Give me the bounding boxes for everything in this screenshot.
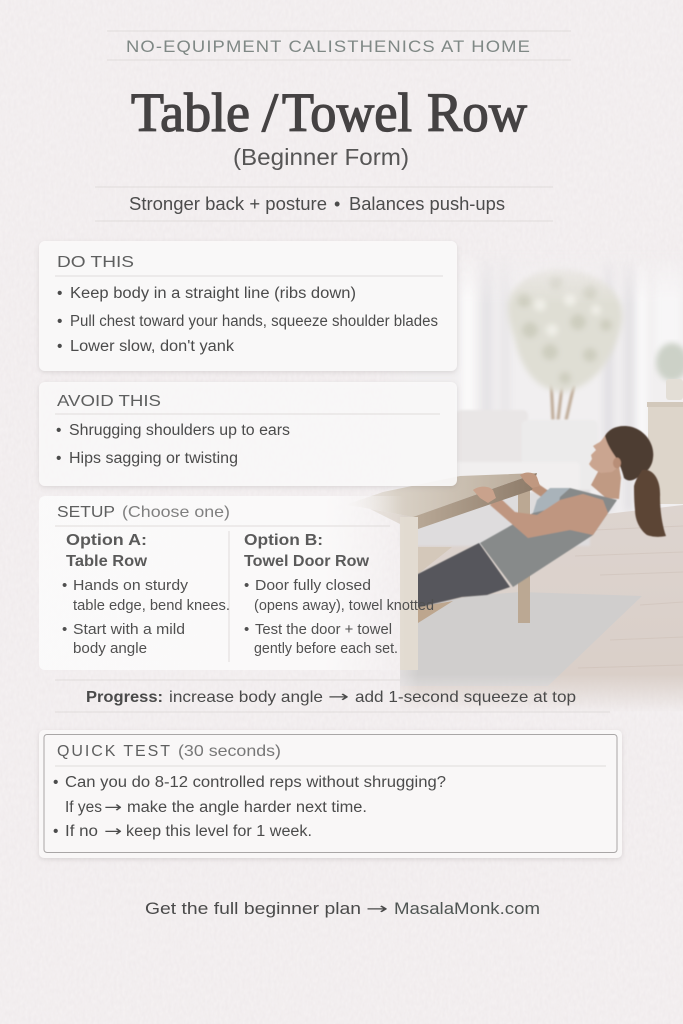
tank chest highlight <box>533 488 570 513</box>
ponytail <box>634 470 666 537</box>
benefits text: • <box>334 194 340 214</box>
room: wall, curtains and floor <box>400 280 683 705</box>
footer call to action <box>145 899 540 918</box>
heading: setup <box>57 504 230 521</box>
panel: do this <box>39 241 457 371</box>
footer call to action: → <box>366 899 388 918</box>
quick test questions: If yes <box>65 799 102 816</box>
option b: towel door row: gently before each set. <box>254 640 398 657</box>
table back leg and lower rails <box>418 490 530 623</box>
hands gripping table <box>473 487 496 503</box>
quick test questions: → <box>104 798 122 816</box>
option a: table row: • <box>62 621 67 638</box>
rug <box>411 592 642 681</box>
title: Row <box>427 82 527 143</box>
option b: towel door row: Option B: <box>244 532 323 549</box>
list: avoid this <box>56 422 290 467</box>
footer call to action: Get the full beginner plan <box>145 900 361 918</box>
list: do this: • <box>57 313 62 330</box>
heading: setup: (Choose one) <box>122 504 230 521</box>
tank top <box>480 488 617 587</box>
option b: towel door row <box>244 532 434 657</box>
table top <box>345 473 540 529</box>
side cabinet with small plant <box>647 343 683 504</box>
option b: towel door row: • <box>244 621 249 638</box>
heading: quick test: (30 seconds) <box>178 743 281 760</box>
quick test questions: Can you do 8-12 controlled reps without shrugging? <box>65 774 446 791</box>
subtitle: (Beginner Form) <box>233 144 409 170</box>
title: / <box>262 82 279 143</box>
eyebrow text: NO-EQUIPMENT CALISTHENICS AT HOME <box>126 38 531 56</box>
option a: table row: • <box>62 577 67 594</box>
option a: table row <box>62 532 230 657</box>
panel: setup <box>39 496 434 670</box>
option a: table row: Option A: <box>66 532 147 549</box>
option a: table row: Hands on sturdy <box>73 577 189 594</box>
woman <box>416 426 666 608</box>
option b: towel door row: • <box>244 577 249 594</box>
heading: quick test <box>57 743 281 760</box>
list: avoid this: Shrugging shoulders up to ears <box>69 422 290 439</box>
list: do this: Lower slow, don't yank <box>70 338 234 355</box>
list: do this <box>57 285 438 355</box>
panel: avoid this <box>39 382 457 486</box>
photo: woman doing a table row in a living room <box>364 270 683 705</box>
option b: towel door row: Door fully closed <box>255 577 371 594</box>
option a: table row: table edge, bend knees. <box>73 597 230 614</box>
progress line <box>55 680 610 712</box>
option a: table row: body angle <box>73 640 147 657</box>
benefits text: Stronger back + posture <box>129 194 327 214</box>
neck <box>590 467 622 500</box>
plant in the background <box>508 269 622 420</box>
list: do this: Pull chest toward your hands, squeeze shoulder blades <box>70 313 438 330</box>
benefits strip <box>95 187 553 221</box>
leggings <box>416 543 510 608</box>
heading: setup: SETUP <box>57 504 115 521</box>
title <box>131 82 527 143</box>
face <box>588 436 616 472</box>
heading: do this: DO THIS <box>57 254 134 271</box>
quick test questions: • <box>53 774 58 791</box>
quick test questions: • <box>53 823 58 840</box>
list: avoid this: • <box>56 450 61 467</box>
benefits text: Balances push-ups <box>349 194 505 214</box>
benefits text <box>129 194 505 214</box>
panel: quick test <box>39 730 622 858</box>
quick test questions: make the angle harder next time. <box>127 799 367 816</box>
list: avoid this: • <box>56 422 61 439</box>
footer call to action: MasalaMonk.com <box>394 900 540 918</box>
title: Towel <box>282 82 412 143</box>
progress line: increase body angle <box>169 689 323 706</box>
heading: avoid this: AVOID THIS <box>57 393 161 410</box>
progress line: → <box>328 687 349 706</box>
sofa <box>418 410 590 546</box>
list: do this: Keep body in a straight line (ribs down) <box>70 285 356 302</box>
near arm <box>490 494 608 538</box>
quick test questions: keep this level for 1 week. <box>126 823 312 840</box>
progress line: Progress: <box>86 689 163 706</box>
option a: table row: Table Row <box>66 553 148 570</box>
title: Table <box>131 82 250 143</box>
option b: towel door row: Test the door + towel <box>255 621 392 638</box>
ear <box>613 458 621 468</box>
quick test questions: If no <box>65 823 98 840</box>
table front leg <box>400 517 418 670</box>
quick test questions <box>53 774 446 840</box>
list: do this: • <box>57 285 62 302</box>
list: do this: • <box>57 338 62 355</box>
option b: towel door row: (opens away), towel knotted <box>254 597 434 614</box>
option a: table row: Start with a mild <box>73 621 185 638</box>
progress line: add 1-second squeeze at top <box>355 689 576 706</box>
hair <box>605 426 653 481</box>
heading: quick test: QUICK TEST <box>57 743 170 760</box>
option b: towel door row: Towel Door Row <box>244 553 370 570</box>
far arm <box>530 484 548 497</box>
list: avoid this: Hips sagging or twisting <box>69 450 238 467</box>
quick test questions: → <box>104 822 122 840</box>
